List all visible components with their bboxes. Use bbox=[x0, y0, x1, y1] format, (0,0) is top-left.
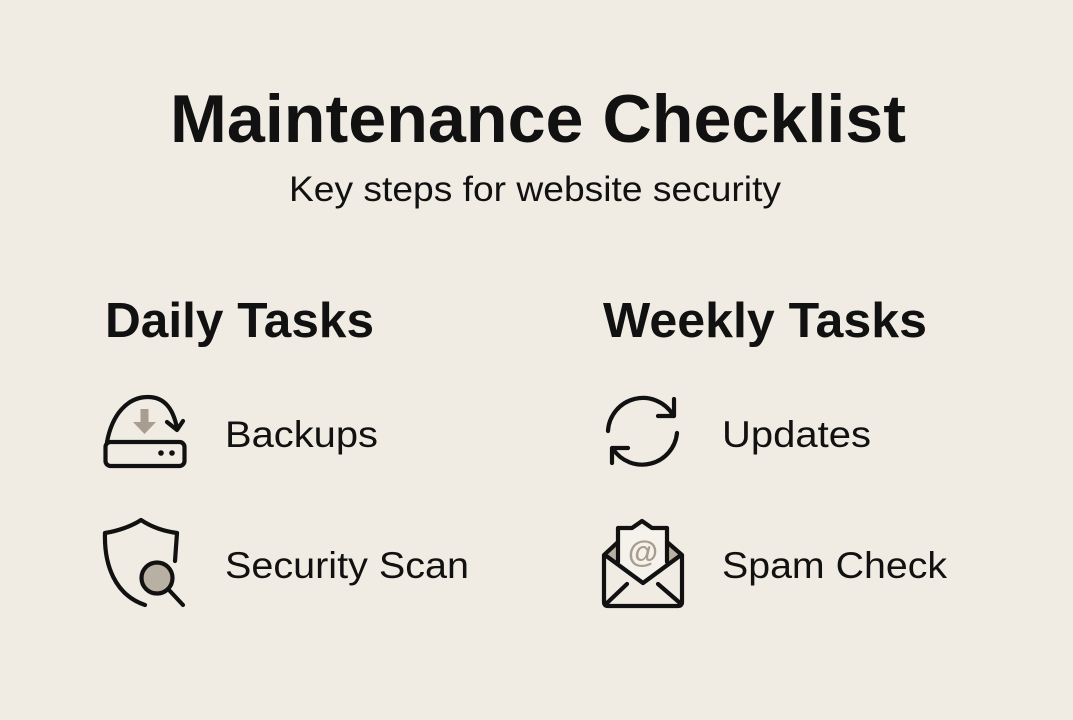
icon: refresh arrows bbox=[608, 398, 677, 465]
icon: shield with magnifier bbox=[105, 520, 183, 605]
panel: weekly tasks bbox=[603, 294, 948, 606]
icon: envelope with at sign: @ bbox=[628, 534, 658, 569]
label: backups: Backups bbox=[225, 414, 378, 455]
icon: envelope with at sign bbox=[604, 521, 682, 606]
label: spam check: Spam Check bbox=[722, 545, 948, 586]
label: security scan: Security Scan bbox=[225, 545, 469, 586]
heading: weekly tasks: Weekly Tasks bbox=[603, 294, 927, 348]
label: updates: Updates bbox=[722, 414, 871, 455]
icon: backup drive bbox=[106, 397, 184, 466]
heading: daily tasks: Daily Tasks bbox=[105, 294, 374, 348]
title: Maintenance Checklist bbox=[170, 81, 906, 157]
subtitle: Key steps for website security bbox=[289, 170, 782, 209]
panel: daily tasks bbox=[105, 294, 469, 605]
